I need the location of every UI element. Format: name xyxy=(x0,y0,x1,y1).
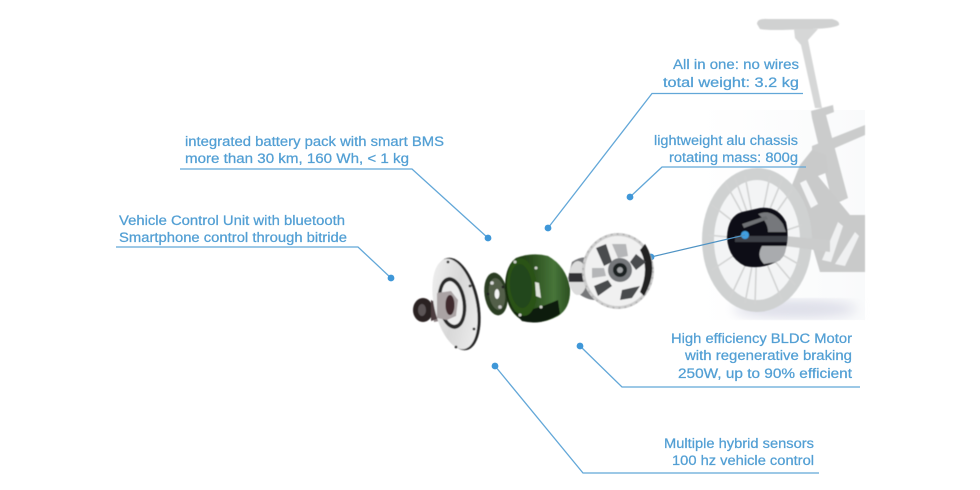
callout: vehicle control unit xyxy=(116,213,394,281)
part: axle nut xyxy=(413,297,456,322)
wheel tyre xyxy=(708,174,806,306)
seat stays and main frame xyxy=(790,150,865,272)
callout: all in one xyxy=(545,57,803,231)
saddle xyxy=(757,19,839,30)
callout: alu chassis: lightweight alu chassis xyxy=(654,133,798,148)
callout: all in one: total weight: 3.2 kg xyxy=(663,75,799,90)
callout: battery pack xyxy=(180,134,491,241)
chain stay xyxy=(785,236,830,252)
callout: battery pack: integrated battery pack with smart BMS xyxy=(185,134,444,149)
callout: alu chassis: rotating mass: 800g xyxy=(669,150,798,165)
callout: BLDC motor xyxy=(577,331,860,387)
ground shadow xyxy=(733,300,857,318)
icon: motor hub on wheel xyxy=(727,208,788,267)
seat clamp and frame tube xyxy=(811,105,848,205)
frame cut-outs xyxy=(800,180,818,208)
callout: hybrid sensors: 100 hz vehicle control xyxy=(672,453,814,468)
callout: BLDC motor: with regenerative braking xyxy=(684,348,852,363)
callout: all in one: All in one: no wires xyxy=(673,57,799,72)
callout: BLDC motor: 250W, up to 90% efficient xyxy=(678,366,852,381)
part: control unit disc xyxy=(425,253,488,355)
bicycle silhouette xyxy=(708,19,865,318)
seat post xyxy=(794,29,822,108)
spokes xyxy=(708,176,802,304)
bike background panel xyxy=(700,110,865,320)
part: sensor board xyxy=(482,271,510,317)
callout: hybrid sensors xyxy=(492,363,819,473)
callout: alu chassis xyxy=(627,133,806,200)
top tube xyxy=(812,125,865,158)
callout: BLDC motor: High efficiency BLDC Motor xyxy=(671,331,853,346)
part: stator shaft xyxy=(568,257,606,300)
part: battery pack xyxy=(505,254,570,322)
leader: motor to bike hub xyxy=(648,235,745,260)
exploded motor xyxy=(413,233,654,355)
callout: vehicle control unit: Smartphone control through bitride xyxy=(119,230,347,245)
callout: battery pack: more than 30 km, 160 Wh, < 1 kg xyxy=(185,151,409,166)
callout: hybrid sensors: Multiple hybrid sensors xyxy=(664,436,814,451)
callout: vehicle control unit: Vehicle Control Unit with bluetooth xyxy=(119,213,345,228)
part: rotor housing xyxy=(582,233,654,309)
